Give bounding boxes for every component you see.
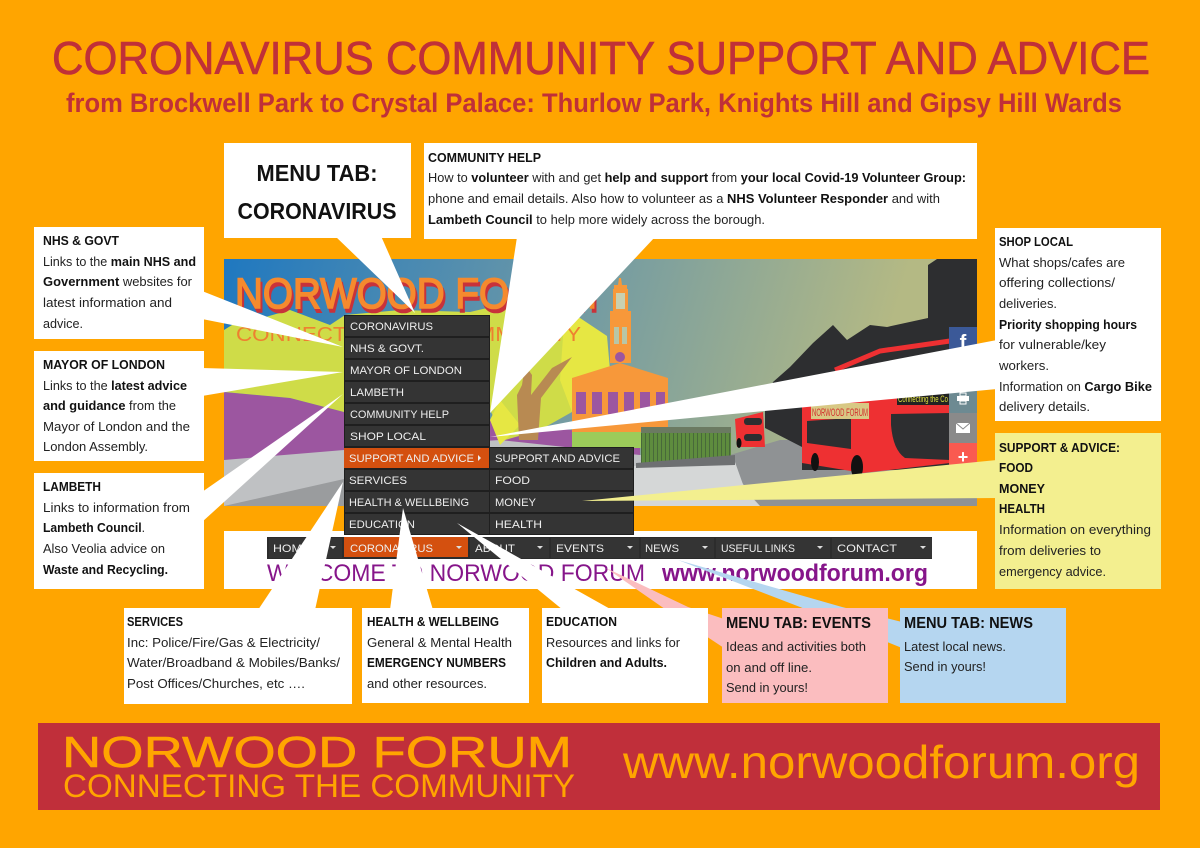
panel: support and advice: HEALTH: [999, 501, 1045, 516]
panel: support and advice: FOOD: [999, 460, 1033, 475]
panel: support and advice: SUPPORT & ADVICE:: [999, 440, 1120, 455]
panel: health and wellbeing: HEALTH & WELLBEING: [367, 614, 499, 629]
dropdown menu: SERVICES: [349, 475, 407, 487]
norwood forum logo: NORWOOD FORUM: [237, 274, 599, 322]
panel: mayor of london: Links to the latest advice: [43, 378, 187, 393]
panel: support and advice: [995, 433, 1161, 589]
dropdown menu: EDUCATION: [349, 519, 415, 531]
panel: health and wellbeing: General & Mental Health: [367, 635, 512, 650]
dropdown menu: MAYOR OF LONDON: [350, 365, 462, 377]
dropdown submenu: HEALTH: [495, 519, 542, 531]
panel: shop local: Priority shopping hours: [999, 317, 1137, 332]
website navigation strip: [224, 531, 977, 589]
dropdown menu: CORONAVIRUS: [350, 321, 433, 333]
website navigation strip: ABOUT: [475, 543, 515, 555]
panel: health and wellbeing: [362, 608, 529, 703]
panel: mayor of london: MAYOR OF LONDON: [43, 357, 165, 372]
panel: mayor of london: London Assembly.: [43, 439, 148, 454]
church: [572, 278, 668, 448]
panel: nhs and govt: NHS & GOVT: [43, 233, 119, 248]
big red bus: [802, 341, 950, 479]
panel: community help: Lambeth Council to help more widely across the borough.: [428, 212, 765, 227]
footer banner: CONNECTING THE COMMUNITY: [63, 768, 575, 804]
panel: shop local: deliveries.: [999, 296, 1057, 311]
panel: services: SERVICES: [127, 614, 183, 629]
panel: services: Water/Broadband & Mobiles/Banks/: [127, 655, 340, 670]
social share buttons: f: [960, 332, 967, 354]
panel: community help: phone and email details. Also how to volunteer as a NHS Volunteer Responder and with: [428, 191, 940, 206]
callout pointers: [202, 236, 997, 648]
panel: support and advice: emergency advice.: [999, 564, 1106, 579]
panel: nhs and govt: advice.: [43, 316, 83, 331]
panel: menu tab coronavirus: CORONAVIRUS: [238, 198, 396, 224]
panel: community help: How to volunteer with and get help and support from your local Covid-19 Volunteer Group:: [428, 170, 966, 185]
panel: menu tab coronavirus: MENU TAB:: [256, 160, 378, 186]
dropdown submenu: MONEY: [495, 497, 537, 509]
title: CORONAVIRUS COMMUNITY SUPPORT AND ADVICE: [52, 32, 1150, 84]
panel: shop local: Information on Cargo Bike: [999, 379, 1152, 394]
dropdown menu: LAMBETH: [350, 387, 404, 399]
footer banner: NORWOOD FORUM: [62, 728, 572, 777]
panel: nhs and govt: [34, 227, 204, 339]
trees: [224, 305, 610, 445]
panel: services: Post Offices/Churches, etc ….: [127, 676, 305, 691]
panel: shop local: What shops/cafes are: [999, 255, 1125, 270]
small red bus: [735, 412, 765, 448]
big red bus: Connecting the Co: [898, 394, 948, 404]
website navigation strip: USEFUL LINKS: [721, 543, 795, 555]
website navigation strip: EVENTS: [556, 543, 604, 555]
panel: menu tab events: on and off line.: [726, 660, 812, 675]
panel: nhs and govt: Links to the main NHS and: [43, 254, 196, 269]
norwood forum logo: NORWOOD FORUM: [235, 270, 597, 318]
panel: education: [542, 608, 708, 703]
dropdown menu: COMMUNITY HELP: [350, 409, 449, 421]
panel: health and wellbeing: and other resources.: [367, 676, 487, 691]
dropdown menu: HEALTH & WELLBEING: [349, 497, 469, 509]
panel: mayor of london: and guidance from the: [43, 398, 176, 413]
panel: menu tab news: MENU TAB: NEWS: [904, 615, 1033, 632]
panel: menu tab news: Latest local news.: [904, 639, 1006, 654]
panel: lambeth: [34, 473, 204, 589]
panel: community help: [424, 143, 977, 239]
fence: [636, 427, 735, 468]
panel: lambeth: Links to information from: [43, 500, 190, 515]
panel: education: Children and Adults.: [546, 655, 667, 670]
dropdown menu: SUPPORT AND ADVICE: [349, 453, 474, 465]
website navigation strip: www.norwoodforum.org: [661, 560, 928, 587]
panel: education: EDUCATION: [546, 614, 617, 629]
panel: services: [124, 608, 352, 704]
panel: support and advice: from deliveries to: [999, 543, 1101, 558]
dropdown submenu: FOOD: [495, 475, 530, 487]
panel: lambeth: Also Veolia advice on: [43, 541, 165, 556]
panel: lambeth: LAMBETH: [43, 479, 101, 494]
social share buttons: +: [958, 447, 968, 467]
website navigation strip: NEWS: [645, 543, 679, 555]
panel: shop local: SHOP LOCAL: [999, 234, 1073, 249]
panel: shop local: for vulnerable/key: [999, 337, 1107, 352]
footer banner: www.norwoodforum.org: [622, 736, 1140, 788]
panel: menu tab events: Send in yours!: [726, 680, 808, 695]
panel: mayor of london: Mayor of London and the: [43, 419, 190, 434]
dropdown submenu: [490, 447, 634, 535]
dropdown menu: [344, 315, 490, 535]
logo strapline: CONNECTING THE COMMUNITY: [236, 324, 581, 346]
panel: services: Inc: Police/Fire/Gas & Electricity/: [127, 635, 320, 650]
panel: menu tab news: Send in yours!: [904, 659, 986, 674]
website navigation strip: CONTACT: [837, 543, 897, 555]
big red bus: NORWOOD FORUM: [812, 407, 868, 419]
panel: support and advice: MONEY: [999, 481, 1045, 496]
dropdown menu: NHS & GOVT.: [350, 343, 424, 355]
panel: support and advice: Information on everything: [999, 522, 1151, 537]
panel: mayor of london: [34, 351, 204, 461]
panel: lambeth: Lambeth Council.: [43, 520, 145, 535]
footer banner: [38, 723, 1160, 810]
website navigation strip: WELCOME TO NORWOOD FORUM: [267, 560, 645, 587]
dropdown submenu: SUPPORT AND ADVICE: [495, 453, 620, 465]
panel: community help: COMMUNITY HELP: [428, 150, 541, 165]
tree trunk: [517, 357, 572, 440]
panel: shop local: offering collections/: [999, 275, 1115, 290]
panel: menu tab news: [900, 608, 1066, 703]
panel: education: Resources and links for: [546, 635, 681, 650]
panel: nhs and govt: latest information and: [43, 295, 172, 310]
panel: shop local: [995, 228, 1161, 421]
dark skyline: [765, 259, 977, 470]
panel: nhs and govt: Government websites for: [43, 274, 193, 289]
website navigation strip: HOME: [273, 543, 310, 555]
panel: lambeth: Waste and Recycling.: [43, 562, 168, 577]
dropdown menu: SHOP LOCAL: [350, 431, 426, 443]
panel: shop local: delivery details.: [999, 399, 1090, 414]
social share buttons: [949, 327, 977, 472]
subtitle: from Brockwell Park to Crystal Palace: Thurlow Park, Knights Hill and Gipsy Hill Wards: [66, 88, 1122, 118]
panel: menu tab coronavirus: [224, 143, 411, 238]
website hero illustration: [224, 259, 977, 506]
panel: menu tab events: MENU TAB: EVENTS: [726, 615, 871, 632]
panel: health and wellbeing: EMERGENCY NUMBERS: [367, 655, 506, 670]
panel: shop local: workers.: [998, 358, 1049, 373]
panel: menu tab events: Ideas and activities both: [726, 639, 866, 654]
panel: menu tab events: [722, 608, 888, 703]
website navigation strip: CORONAVIRUS: [350, 543, 433, 555]
